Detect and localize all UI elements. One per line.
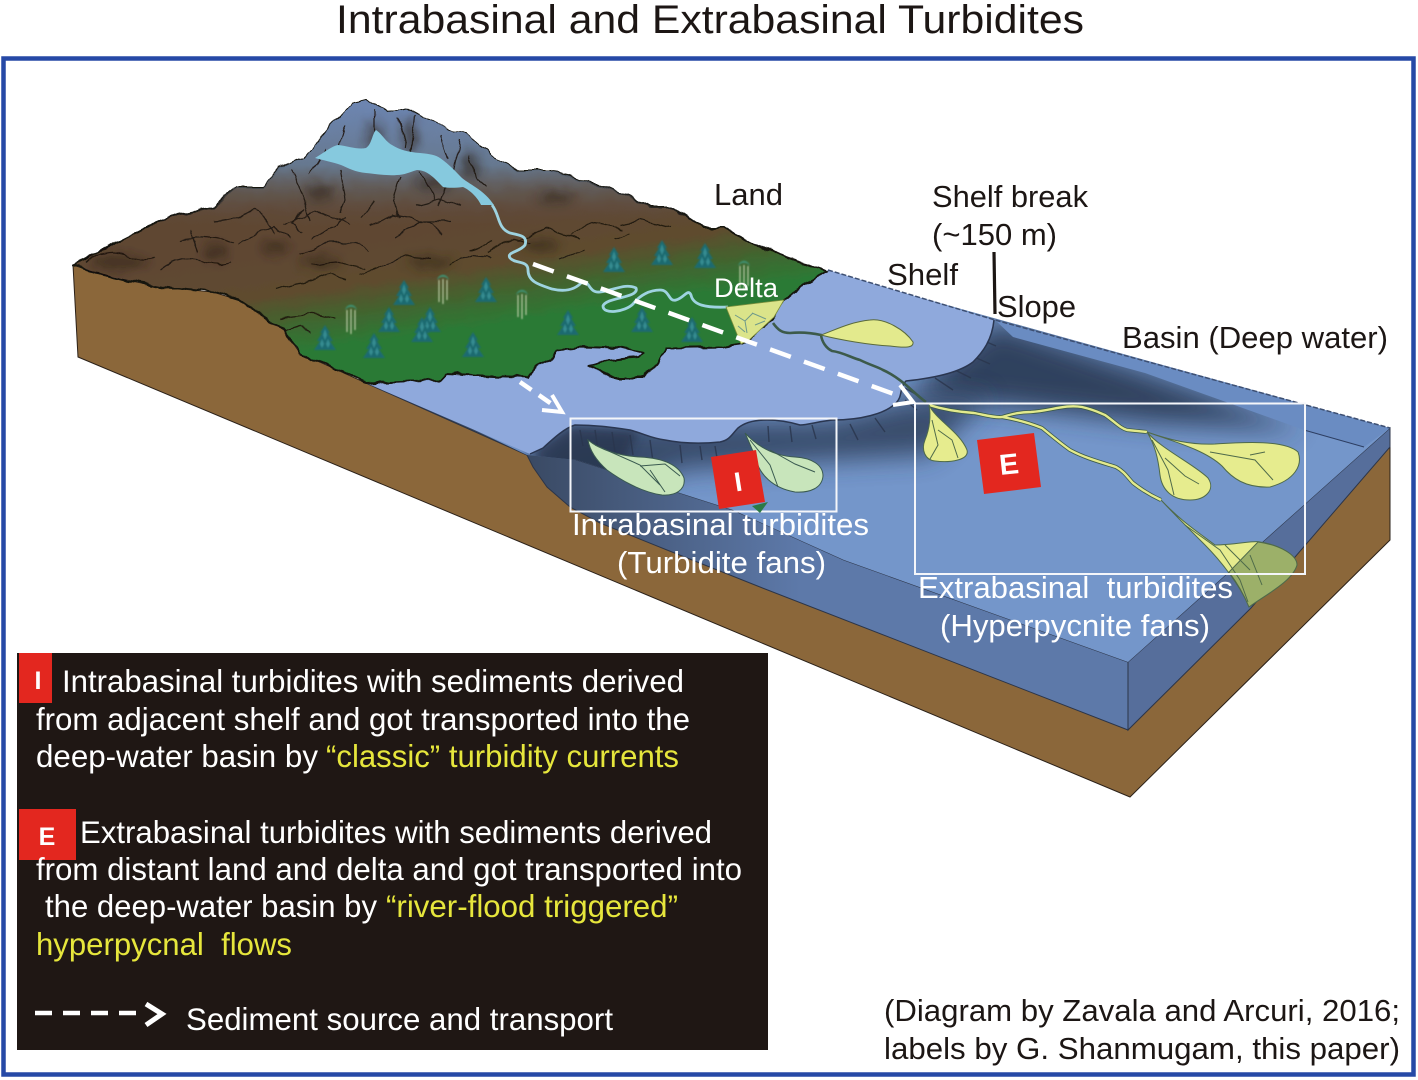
legend text: extrabasinal: hyperpycnal flows (36, 926, 292, 962)
legend arrow: dashed (35, 1004, 162, 1025)
legend text: extrabasinal (36, 814, 742, 962)
water: right face (1128, 428, 1390, 730)
badge: I (711, 450, 768, 513)
badge: I: I (732, 467, 744, 497)
land: mountains and lowland (73, 100, 828, 383)
shelf (366, 270, 994, 454)
legend text: extrabasinal: “river-flood triggered” (386, 888, 678, 924)
legend text: intrabasinal: “classic” turbidity currents (326, 738, 679, 774)
arrow: shelf to basin (520, 382, 562, 412)
water: front face (366, 383, 1128, 730)
delta (726, 300, 784, 344)
trees (314, 240, 750, 358)
marker: shelf break line (994, 252, 995, 314)
badge: E (977, 433, 1041, 494)
box: extrabasinal (915, 404, 1305, 574)
legend badge: I (19, 653, 52, 703)
block diagram (73, 100, 1390, 797)
shelf fan and channel (773, 320, 926, 402)
label: Extrabasinal turbidites: Extrabasinal turbidites (918, 570, 1233, 605)
river (492, 205, 728, 312)
credit (884, 993, 1400, 1066)
extrabasinal channels (929, 405, 1161, 500)
label: Shelf break: Shelf break (932, 179, 1088, 214)
legend text: extrabasinal: Extrabasinal turbidites with sediments derived (80, 814, 712, 850)
label: Intrabasinal turbidites: (Turbidite fans) (617, 545, 826, 580)
label: Basin: Basin (Deep water) (1122, 320, 1388, 355)
legend text: sediment source: Sediment source and transport (186, 1001, 613, 1037)
slope: dark shading (527, 320, 1390, 587)
legend text: intrabasinal: deep-water basin by (36, 738, 318, 774)
legend badge: E (19, 809, 76, 860)
credit: (Diagram by Zavala and Arcuri, 2016; (884, 993, 1400, 1028)
label: Shelf break: (~150 m) (932, 217, 1057, 252)
label: Slope: Slope (997, 289, 1076, 324)
legend badge: E: E (39, 823, 55, 851)
legend text: intrabasinal: from adjacent shelf and got transported into the (36, 701, 690, 737)
label: Extrabasinal turbidites: (Hyperpycnite fans) (940, 608, 1210, 643)
basin surface (370, 272, 1390, 662)
slope hachures (580, 340, 996, 463)
label: Shelf: Shelf (887, 257, 958, 292)
panel: legend (17, 653, 768, 1050)
label: Land: Land (714, 177, 783, 212)
badge: E: E (998, 448, 1020, 482)
label: Extrabasinal turbidites (918, 570, 1233, 643)
fan over slope edge: olive portion (1229, 542, 1297, 607)
label: Intrabasinal turbidites (572, 507, 869, 580)
extrabasinal fans (923, 405, 1299, 607)
label: Delta: Delta (714, 273, 779, 303)
label: Shelf break (932, 179, 1088, 252)
legend text: extrabasinal: the deep-water basin by (45, 888, 377, 924)
label: Intrabasinal turbidites: Intrabasinal turbidites (572, 507, 869, 542)
basin far strip (995, 320, 1390, 447)
intrabasinal fans (588, 433, 823, 495)
box: intrabasinal (570, 418, 836, 512)
credit: labels by G. Shanmugam, this paper) (884, 1031, 1400, 1066)
legend text: intrabasinal: Intrabasinal turbidites with sediments derived (62, 663, 684, 699)
legend text: intrabasinal (36, 663, 690, 774)
arrow: delta to basin (533, 264, 913, 405)
legend text: extrabasinal: from distant land and delta and got transported into (36, 851, 742, 887)
legend badge: I: I (35, 667, 41, 695)
sediment block: brown sides (73, 265, 1390, 797)
lake (315, 130, 494, 205)
